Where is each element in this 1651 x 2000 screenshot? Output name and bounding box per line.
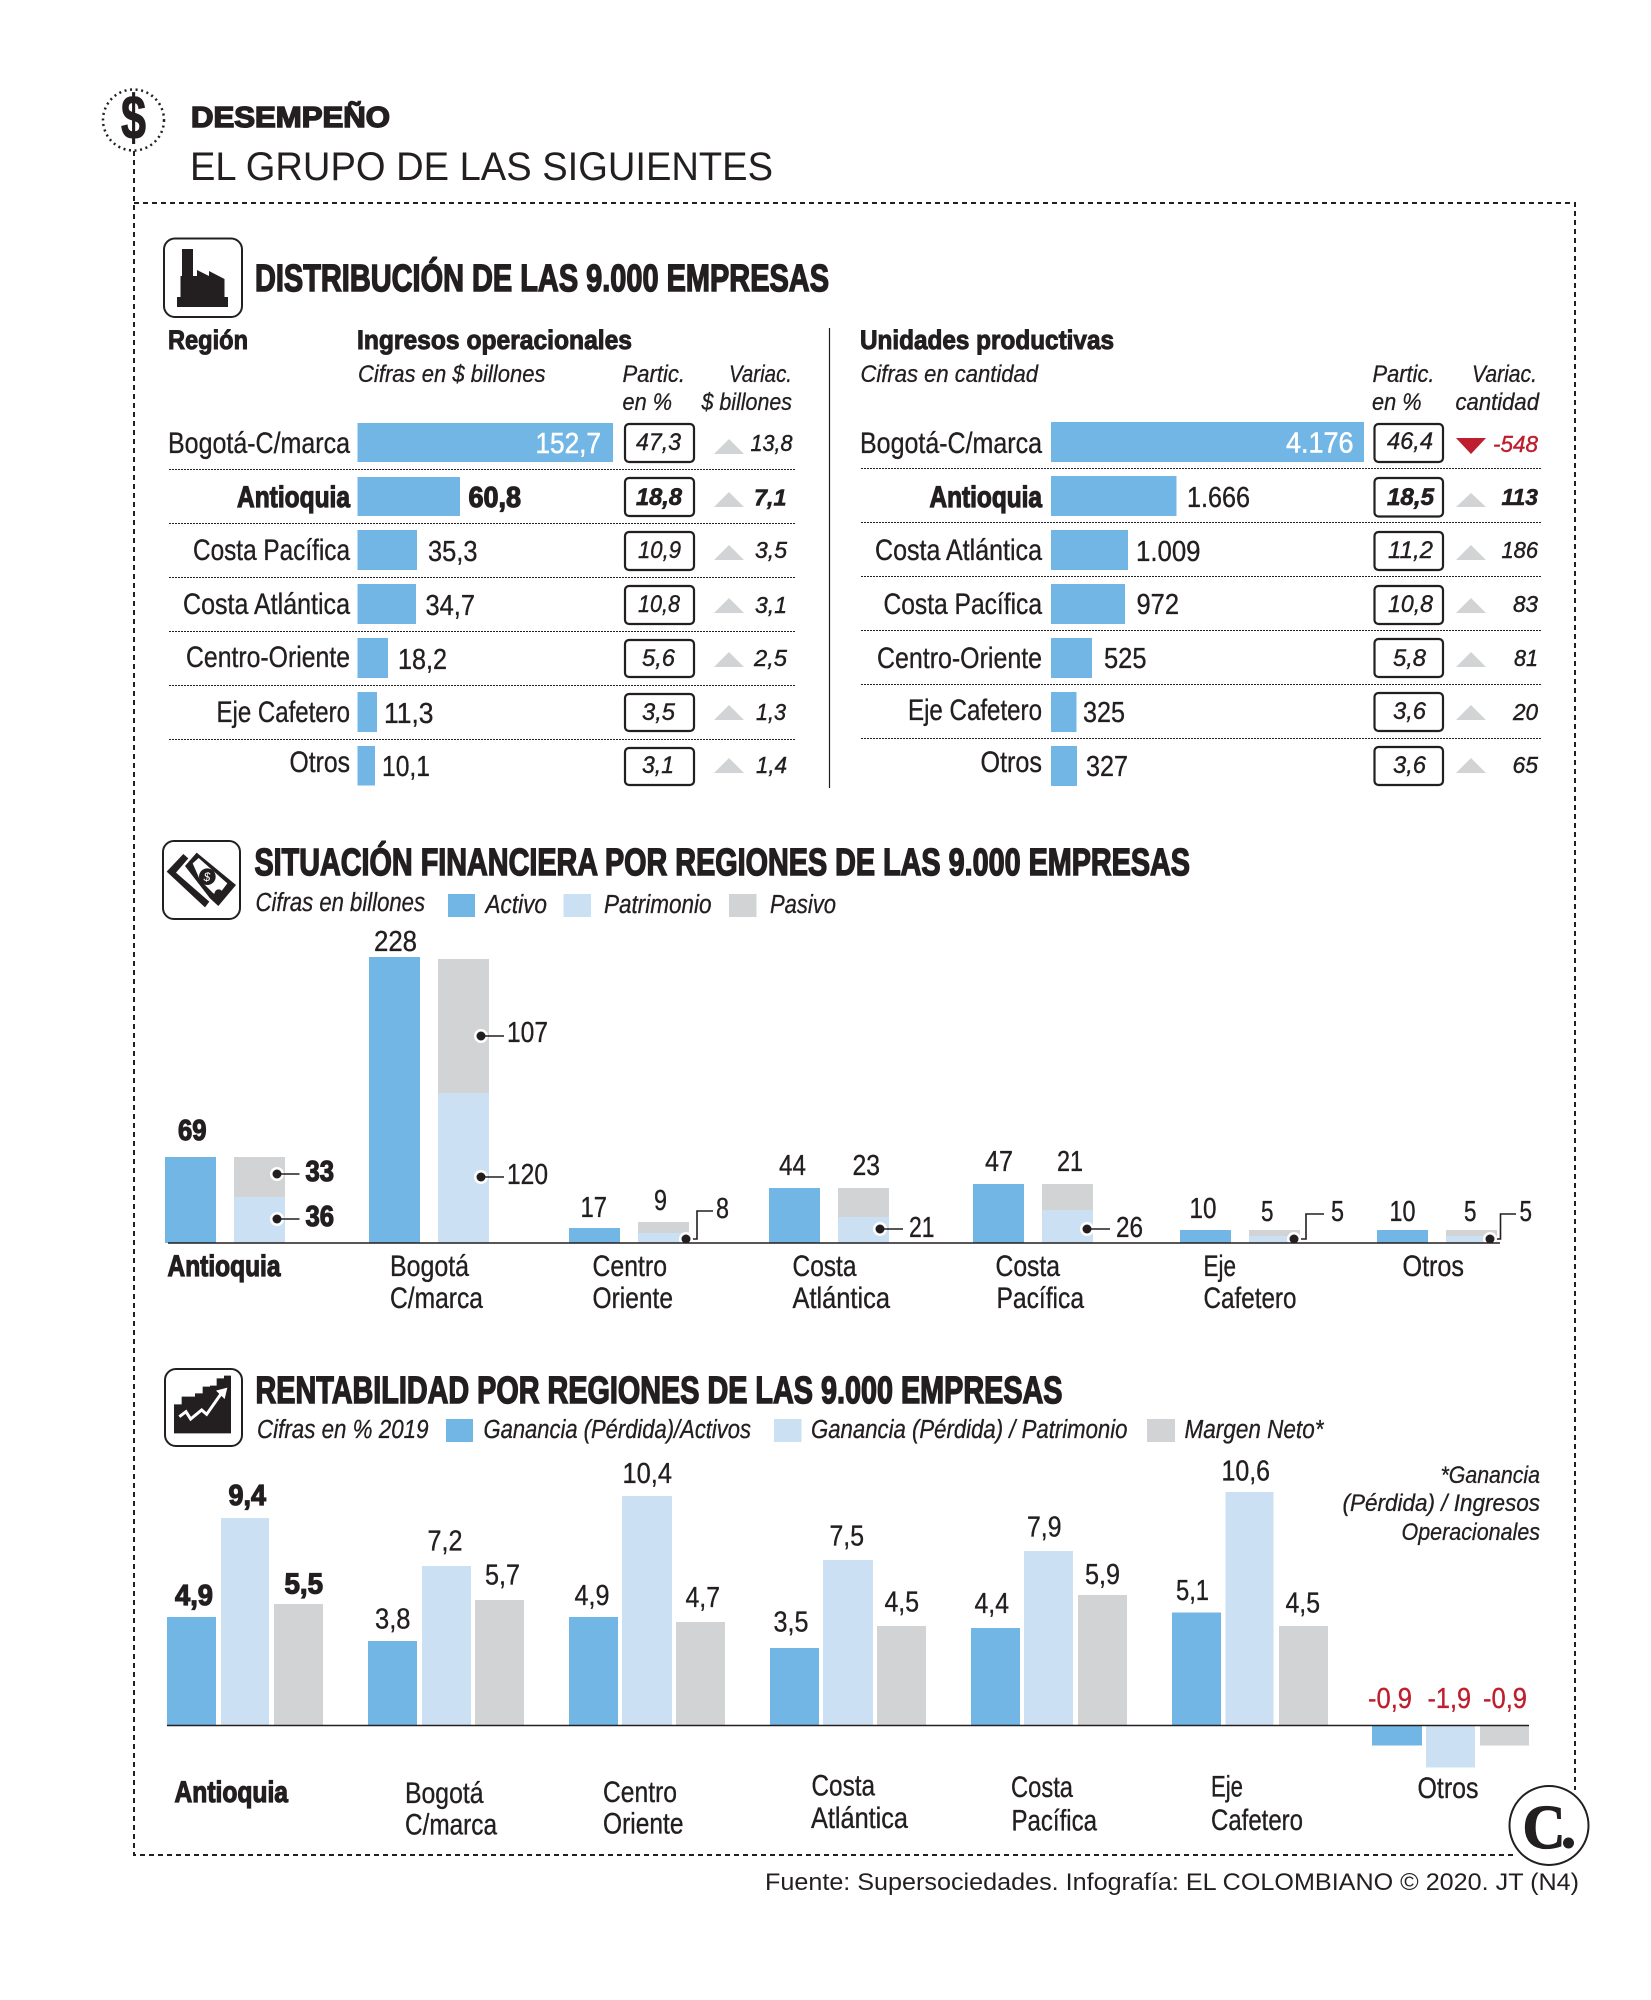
bar chart: situación financiera [165,926,1532,1315]
group: Antioquia: 36 [306,1201,334,1233]
group: Otros: 10 [1390,1196,1416,1228]
legend: Ganancia (Pérdida)/Activos [484,1416,751,1444]
legend: Cifras en billones [256,889,425,917]
group: Centro Oriente: Oriente [603,1808,684,1840]
row: Centro-Oriente: Centro-Oriente [877,642,1042,675]
footnote: *Ganancia [1440,1462,1540,1489]
row: Centro-Oriente: 18,2 [398,644,447,676]
footnote: Operacionales [1402,1519,1540,1546]
panel: rentabilidad [165,1369,1540,1842]
group: Antioquia: Antioquia [168,1250,281,1283]
logo [1510,1786,1588,1865]
group: Antioquia: 9,4 [228,1480,266,1512]
row: Centro-Oriente: 525 [1104,643,1146,675]
row: Centro-Oriente: 5,6 [642,645,675,672]
title [190,100,773,189]
group: Costa Pacífica: 47 [985,1146,1013,1178]
icon: dollar [103,84,164,153]
group: Costa Atlántica: 21 [909,1212,934,1244]
group: Otros: Otros [1418,1772,1478,1805]
icon: dollar: $ [121,84,146,153]
row: Costa Pacífica: Costa Pacífica [884,588,1042,621]
heading: situación financiera: SITUACIÓN FINANCIERA POR REGIONES DE LAS 9.000 EMPRESAS [254,840,1190,884]
row: Antioquia: 113 [1502,484,1538,510]
group: Centro Oriente: 17 [580,1192,607,1224]
group: Centro Oriente [569,1458,725,1840]
row: Costa Pacífica: Costa Pacífica [193,534,350,567]
row: Antioquia: 7,1 [754,484,786,510]
row: Bogotá-C/marca: 46,4 [1387,428,1433,455]
table: unidades productivas [860,325,1542,786]
table header: en % [622,389,672,416]
group: Eje Cafetero: 5 [1261,1196,1274,1228]
row: Eje Cafetero [908,692,1538,732]
group: Centro Oriente: 8 [716,1193,729,1225]
group: Eje Cafetero: 4,5 [1286,1588,1320,1620]
table: ingresos operacionales [168,325,795,786]
group: Costa Pacífica: 7,9 [1027,1512,1062,1544]
group: Bogotá: C/marca [390,1282,483,1315]
group: Costa Atlántica [769,1150,934,1315]
logo: C [1522,1794,1566,1862]
legend: Cifras en % 2019 [257,1416,428,1444]
group: Costa Atlántica: 44 [779,1150,806,1182]
legend: Pasivo [770,891,836,919]
group: Costa Pacífica: Costa [996,1250,1060,1283]
table header: Variac. [1472,361,1537,388]
bar chart: rentabilidad [167,1456,1529,1842]
row: Antioquia: 18,8 [636,484,682,511]
row: Costa Atlántica [875,530,1539,570]
legend: Margen Neto* [1184,1416,1324,1444]
group: Costa Pacífica: 26 [1116,1212,1143,1244]
panel: situación financiera [163,840,1532,1315]
row: Otros: 65 [1512,752,1539,778]
group: Costa Pacífica: 21 [1057,1146,1083,1178]
group: Eje Cafetero: Eje [1211,1770,1243,1804]
group: Bogotá: Bogotá [390,1250,470,1283]
row: Eje Cafetero: 11,3 [384,698,434,730]
group: Bogotá: 107 [507,1017,548,1049]
row: Antioquia: Antioquia [930,481,1042,514]
row: Eje Cafetero: Eje Cafetero [216,696,350,729]
row: Bogotá-C/marca: Bogotá-C/marca [168,427,350,460]
footnote [1342,1462,1540,1546]
group: Eje Cafetero: Cafetero [1211,1804,1303,1837]
group: Bogotá [368,1526,524,1842]
group: Eje Cafetero: 5,1 [1176,1575,1209,1607]
group: Centro Oriente: Centro [603,1776,677,1809]
row: Costa Pacífica [193,530,788,570]
table header: Unidades productivas [860,325,1114,355]
legend [256,889,836,919]
row: Costa Pacífica: 83 [1513,591,1538,617]
row: Otros [290,746,787,786]
group: Eje Cafetero [1180,1193,1344,1315]
table header: en % [1372,389,1422,416]
row: Bogotá-C/marca: -548 [1493,431,1538,457]
group: Centro Oriente: 4,7 [686,1582,720,1614]
group: Costa Atlántica: 4,5 [884,1586,919,1618]
group: Centro Oriente: 10,4 [622,1458,672,1490]
group: Costa Atlántica: Atlántica [792,1282,891,1315]
group: Centro Oriente: 9 [654,1185,667,1217]
group: Costa Pacífica [973,1146,1143,1315]
row: Costa Pacífica: 3,5 [755,537,788,563]
row: Eje Cafetero: 325 [1083,697,1125,729]
group: Centro Oriente: 4,9 [574,1580,610,1612]
group: Antioquia: Antioquia [174,1776,288,1809]
row: Otros: 10,1 [382,751,430,783]
footnote: (Pérdida) / Ingresos [1342,1490,1540,1517]
row: Bogotá-C/marca: 4.176 [1286,428,1354,460]
row: Centro-Oriente [877,638,1538,678]
group: Costa Atlántica: 7,5 [830,1520,864,1552]
group: Bogotá: 5,7 [485,1560,520,1592]
table header: $ billones [701,389,792,416]
row: Costa Atlántica: Costa Atlántica [875,534,1043,567]
table header: Partic. [622,361,685,388]
group: Eje Cafetero [1172,1456,1328,1837]
group: Antioquia: 5,5 [284,1568,323,1600]
icon: banknotes [163,841,240,919]
table header: Cifras en cantidad [860,361,1039,388]
group: Bogotá: 3,8 [375,1604,410,1636]
row: Costa Atlántica: 186 [1502,537,1539,563]
heading: distribución: DISTRIBUCIÓN DE LAS 9.000 EMPRESAS [255,256,829,300]
row: Costa Atlántica [183,584,787,624]
table header [860,325,1540,416]
table header [357,325,792,416]
group: Eje Cafetero: Cafetero [1204,1282,1296,1315]
row: Costa Atlántica: 3,1 [755,592,787,618]
row: Centro-Oriente: 2,5 [753,645,788,671]
row: Antioquia [237,477,786,516]
group: Otros: Otros [1402,1250,1464,1283]
group: Costa Pacífica: Costa [1011,1771,1073,1804]
group: Eje Cafetero: 10 [1190,1193,1216,1225]
group: Antioquia: 4,9 [175,1580,213,1612]
row: Costa Atlántica: 10,8 [638,591,680,618]
table header: Variac. [729,361,792,388]
group: Costa Pacífica: 5,9 [1085,1559,1120,1591]
column head: región: Región [168,325,248,355]
group: Bogotá: 228 [374,926,417,958]
row: Antioquia: Antioquia [237,481,350,514]
heading: rentabilidad: RENTABILIDAD POR REGIONES DE LAS 9.000 EMPRESAS [256,1370,1062,1412]
row: Otros: 3,1 [642,752,674,779]
group: Bogotá [369,926,548,1315]
title: DESEMPEÑO [191,100,390,134]
row: Otros: Otros [980,746,1042,779]
group: Otros [1368,1683,1529,1805]
group: Bogotá: 120 [507,1159,548,1191]
row: Centro-Oriente: 81 [1514,645,1538,671]
row: Antioquia: 1.666 [1187,482,1250,514]
group: Otros: -1,9 [1428,1683,1471,1715]
group: Bogotá: 7,2 [428,1526,462,1558]
group: Antioquia [165,1115,334,1283]
row: Otros: 327 [1086,751,1128,783]
row: Eje Cafetero: 3,6 [1393,698,1426,725]
group: Costa Atlántica: 23 [852,1150,880,1182]
source credit: Fuente: Supersociedades. Infografía: EL COLOMBIANO © 2020. JT (N4) [765,1869,1579,1896]
group: Otros: 5 [1520,1196,1532,1228]
group: Costa Pacífica [971,1512,1127,1838]
group: Centro Oriente [569,1185,729,1315]
row: Bogotá-C/marca [168,423,792,462]
group: Otros: 5 [1464,1196,1476,1228]
group: Bogotá: C/marca [405,1808,497,1842]
group: Costa Atlántica: Atlántica [811,1802,908,1835]
group: Costa Pacífica: 4,4 [974,1588,1009,1620]
group: Eje Cafetero: 5 [1331,1196,1344,1228]
group: Otros [1377,1196,1532,1283]
icon: banknotes: $ [203,870,211,884]
icon: rising chart [165,1369,242,1446]
row: Centro-Oriente [186,638,788,678]
legend: Patrimonio [604,891,712,919]
group: Costa Atlántica: 3,5 [774,1606,808,1638]
row: Bogotá-C/marca: 47,3 [636,429,681,456]
row: Costa Atlántica: Costa Atlántica [183,588,351,621]
row: Costa Pacífica: 10,9 [638,537,681,564]
group: Costa Pacífica: Pacífica [1012,1804,1097,1838]
group: Bogotá: Bogotá [405,1777,484,1810]
group: Antioquia: 33 [306,1156,334,1188]
row: Otros: 1,4 [756,752,787,778]
row: Antioquia: 18,5 [1387,484,1434,511]
row: Eje Cafetero [216,692,786,732]
row: Centro-Oriente: Centro-Oriente [186,641,350,674]
row: Eje Cafetero: 1,3 [756,699,786,725]
row: Bogotá-C/marca: Bogotá-C/marca [860,427,1042,460]
group: Antioquia [167,1480,323,1809]
row: Eje Cafetero: 20 [1512,699,1538,725]
group: Costa Atlántica: Costa [812,1770,875,1802]
panel: distribución [164,238,1542,788]
table header: Cifras en $ billones [358,361,546,388]
row: Centro-Oriente: 5,8 [1393,645,1426,672]
row: Bogotá-C/marca: 13,8 [750,430,792,456]
table header: cantidad [1456,389,1540,416]
group: Otros: -0,9 [1368,1683,1412,1715]
row: Costa Pacífica: 10,8 [1388,591,1433,618]
title: EL GRUPO DE LAS SIGUIENTES [190,145,773,189]
group: Costa Atlántica [770,1520,926,1835]
row: Costa Pacífica: 35,3 [428,536,478,568]
row: Costa Atlántica: 34,7 [426,590,475,622]
row: Antioquia: 60,8 [468,482,521,514]
row: Costa Pacífica [884,584,1538,624]
row: Bogotá-C/marca: 152,7 [536,428,601,460]
row: Otros: Otros [290,746,350,779]
group: Antioquia: 69 [178,1115,206,1147]
row: Otros: 3,6 [1393,752,1426,779]
group: Costa Pacífica: Pacífica [996,1282,1084,1315]
table header: Ingresos operacionales [357,325,632,355]
row: Bogotá-C/marca [860,422,1538,462]
row: Eje Cafetero: Eje Cafetero [908,694,1042,727]
legend: Ganancia (Pérdida) / Patrimonio [811,1416,1128,1444]
row: Costa Atlántica: 11,2 [1388,537,1433,564]
row: Otros [980,746,1539,786]
group: Otros: -0,9 [1483,1683,1527,1715]
row: Antioquia [930,476,1538,516]
icon: factory [164,238,242,317]
dashed frame [134,151,1575,1855]
row: Costa Atlántica: 1.009 [1136,536,1200,568]
group: Centro Oriente: Oriente [592,1282,673,1315]
group: Costa Atlántica: Costa [792,1250,857,1283]
group: Centro Oriente: Centro [592,1250,667,1283]
group: Eje Cafetero: 10,6 [1222,1456,1270,1488]
table header: Partic. [1372,361,1434,388]
row: Eje Cafetero: 3,5 [642,699,675,726]
group: Eje Cafetero: Eje [1204,1250,1236,1283]
row: Costa Pacífica: 972 [1136,589,1179,621]
legend [257,1416,1324,1444]
legend: Activo [484,891,547,919]
